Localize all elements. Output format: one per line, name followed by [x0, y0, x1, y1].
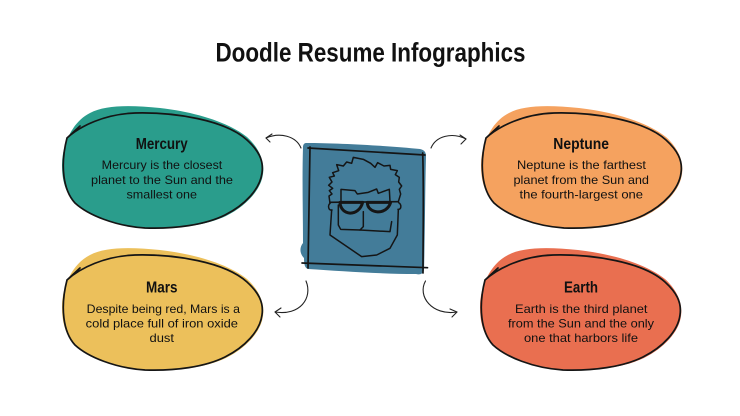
heading: Earth: Earth	[564, 280, 598, 296]
arrow: to Mercury	[266, 134, 301, 148]
text: Mars description: dust	[150, 331, 175, 345]
heading: Mars: Mars	[146, 280, 178, 296]
text: Neptune description: Neptune is the farthest	[517, 158, 647, 172]
arrow: to Neptune	[431, 135, 466, 148]
title: Doodle Resume Infographics	[216, 38, 526, 68]
text: Neptune description: planet from the Sun and	[514, 173, 649, 187]
panel: Mercury	[62, 106, 263, 228]
panel: Earth	[480, 248, 681, 370]
heading: Mercury: Mercury	[136, 136, 188, 153]
text: Earth description	[508, 302, 654, 345]
text: Mars description	[86, 302, 240, 345]
text: Earth description: Earth is the third planet	[515, 302, 648, 316]
blob: Mars	[62, 248, 263, 370]
blob: Earth	[480, 248, 681, 370]
panel: Neptune	[481, 106, 682, 228]
text: Mercury description: Mercury is the closest	[102, 158, 223, 172]
text: Neptune description	[514, 158, 649, 202]
arrow: to Mars	[275, 281, 308, 317]
arrow: to Earth	[423, 281, 457, 317]
heading: Neptune: Neptune	[553, 136, 609, 153]
text: Mercury description: smallest one	[126, 188, 197, 202]
text: Neptune description: the fourth-largest one	[520, 188, 643, 202]
text: Mercury description: planet to the Sun and the	[91, 173, 233, 187]
panel: Mars	[62, 248, 263, 370]
blob: Neptune	[481, 106, 682, 228]
text: Earth description: one that harbors life	[524, 331, 638, 345]
text: Mars description: Despite being red, Mars is a	[87, 302, 240, 316]
text: Mars description: cold place full of iron oxide	[86, 316, 238, 330]
icon: doodle face portrait	[300, 143, 428, 274]
blob: Mercury	[62, 106, 263, 228]
text: Earth description: from the Sun and the only	[508, 316, 654, 330]
text: Mercury description	[91, 158, 233, 202]
